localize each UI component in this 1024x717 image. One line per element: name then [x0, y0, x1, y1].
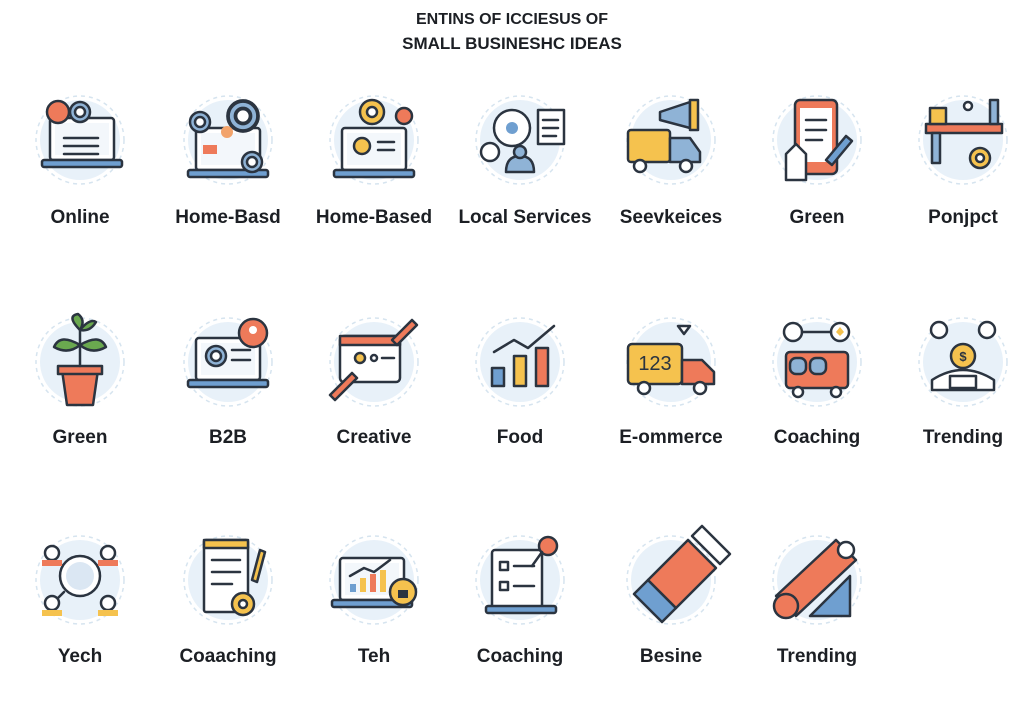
cell: Home-Based [316, 96, 432, 228]
cell: Local Services [458, 96, 592, 228]
cell: Coaching (row 2) [773, 318, 861, 448]
cell: Green (row 2): Green [53, 427, 107, 448]
cell: Ponjpct: Ponjpct [928, 207, 999, 228]
cell: Food [476, 318, 564, 448]
cell: Teh: Teh [358, 646, 390, 667]
title [402, 11, 622, 53]
cell: Online: Online [50, 207, 110, 228]
cell: Trending (row 3): Trending [777, 646, 857, 667]
cell: E-ommerce [619, 318, 723, 448]
cell: Green (top): Green [790, 207, 844, 228]
cell: Coaaching: Coaaching [179, 646, 277, 667]
cell: Creative [330, 318, 418, 448]
cell: Trending (row 2): $ [959, 349, 967, 364]
cell: Ponjpct [919, 96, 1007, 228]
cell: Home-Basd [175, 96, 281, 228]
title: ENTINS OF ICCIESUS OF [416, 11, 608, 28]
cell: B2B [184, 318, 272, 448]
cell: Coaaching [179, 536, 277, 667]
cell: Home-Based: Home-Based [316, 207, 432, 228]
cell: Seevkeices [620, 96, 722, 228]
cell: Local Services: Local Services [458, 207, 592, 228]
cell: Trending (row 3) [773, 536, 861, 667]
cell: B2B: B2B [209, 427, 247, 448]
cell: E-ommerce: E-ommerce [619, 427, 723, 448]
cell: Online [36, 96, 124, 228]
cell: Trending (row 2): Trending [923, 427, 1003, 448]
cell: Yech [36, 536, 124, 667]
cell: Seevkeices: Seevkeices [620, 207, 722, 228]
cell: Coaching (row 3) [476, 536, 564, 667]
cell: Trending (row 2) [919, 318, 1007, 448]
title: SMALL BUSINESHC IDEAS [402, 34, 622, 53]
cell: Teh [330, 536, 418, 667]
cell: Green (row 2) [36, 314, 124, 448]
cell: Green (top) [773, 96, 861, 228]
cell: Creative: Creative [336, 427, 412, 448]
cell: Home-Basd: Home-Basd [175, 207, 281, 228]
cell: Coaching (row 3): Coaching [477, 646, 563, 667]
cell: Food: Food [497, 427, 543, 448]
cell: Yech: Yech [58, 646, 102, 667]
cell: Coaching (row 2): Coaching [774, 427, 860, 448]
cell: Besine: Besine [640, 646, 702, 667]
cell: E-ommerce: 123 [638, 353, 672, 375]
cell: Besine [627, 526, 730, 667]
